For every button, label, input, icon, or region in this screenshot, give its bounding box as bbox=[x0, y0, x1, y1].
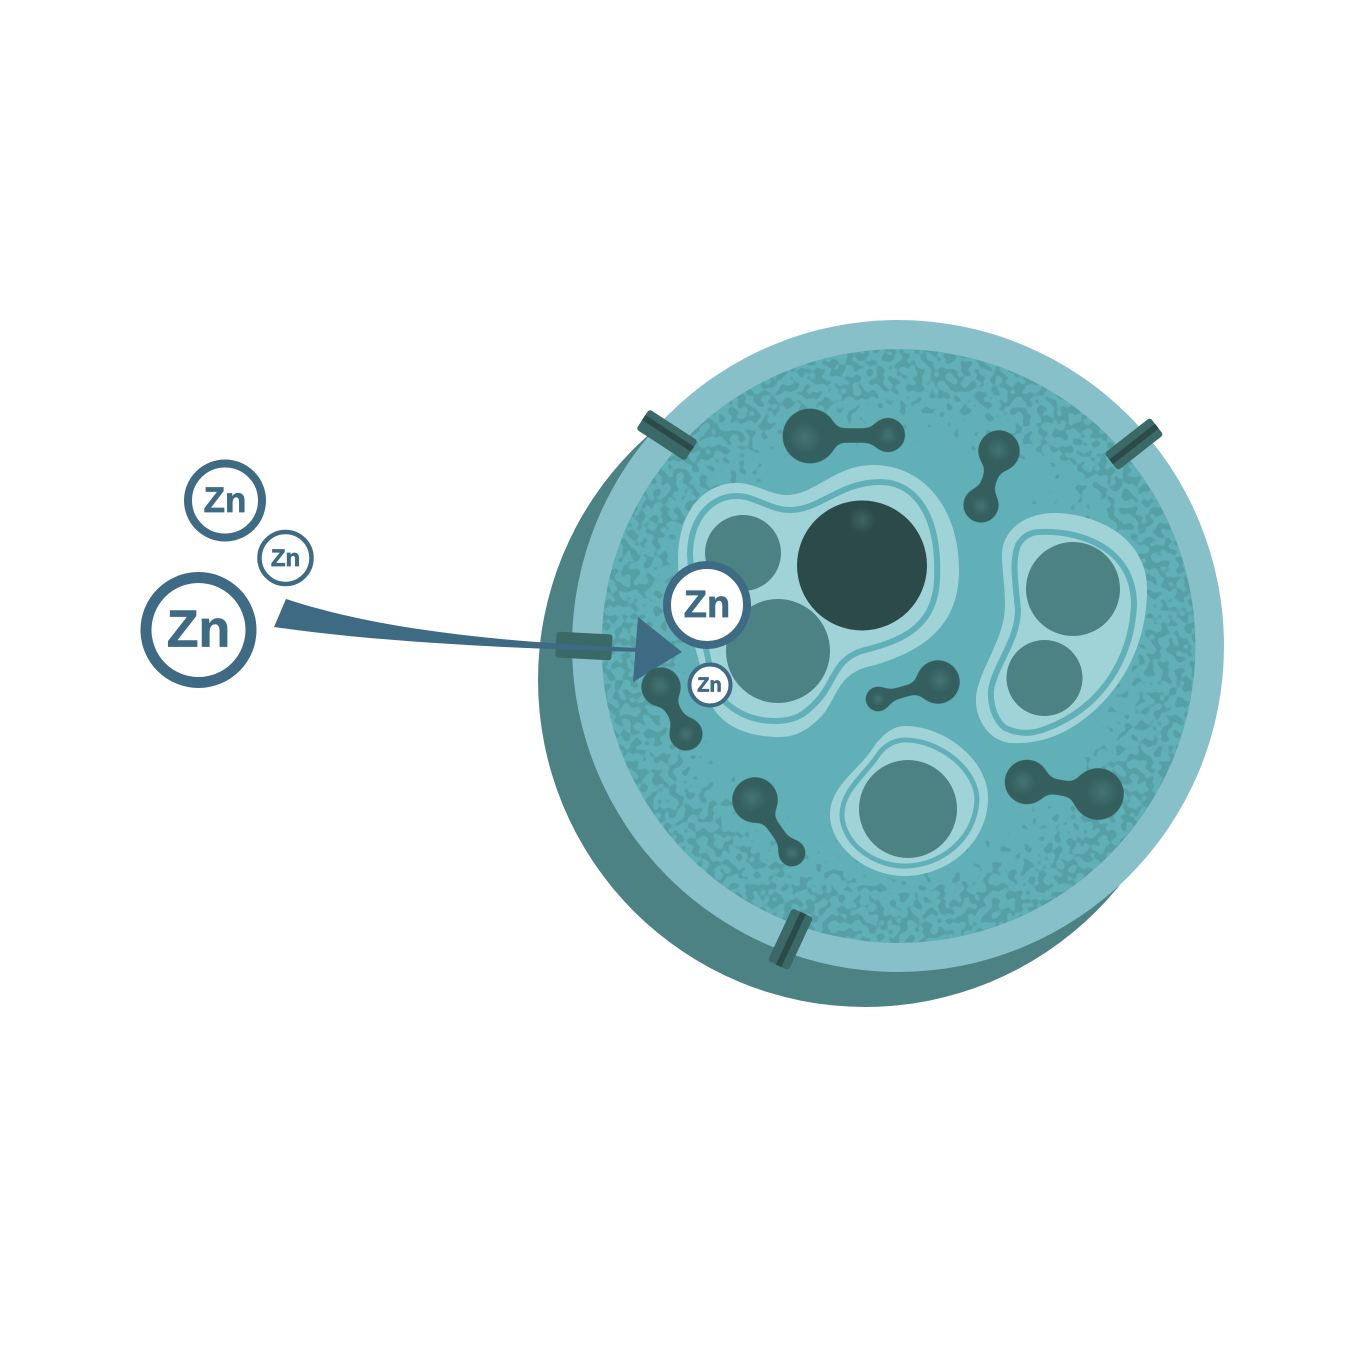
organelle: bottom vesicle bbox=[830, 726, 988, 876]
zinc ion: large: Zn bbox=[167, 600, 230, 658]
dumbbell organelle: lower right bbox=[1005, 760, 1124, 820]
membrane channel: top left bbox=[636, 409, 698, 461]
zinc ion: small: Zn bbox=[271, 545, 300, 572]
organelle: right vesicle bbox=[976, 513, 1147, 743]
organelle: large vesicle with nucleus bbox=[678, 465, 959, 737]
nucleus bbox=[797, 500, 927, 630]
zinc ion: medium, top: Zn bbox=[204, 481, 246, 520]
membrane channel: top right bbox=[1104, 417, 1164, 471]
arrow: zinc uptake bbox=[274, 599, 682, 682]
dumbbell organelle: lower left bbox=[732, 778, 806, 866]
zinc ion: large bbox=[146, 578, 251, 682]
dumbbell organelle: upper right bbox=[964, 430, 1020, 522]
dumbbell organelle: top bbox=[783, 409, 905, 463]
zinc ion: small bbox=[260, 532, 312, 584]
zinc ion: inside cell, large: Zn bbox=[684, 584, 730, 626]
zinc ion: inside cell, small bbox=[690, 664, 730, 706]
membrane channel: left entry bbox=[555, 632, 613, 660]
zinc ion: inside cell, large bbox=[667, 565, 747, 645]
cell membrane ring bbox=[572, 320, 1224, 972]
cytoplasm speckle texture bbox=[602, 349, 1196, 943]
dumbbell organelle: near arrow head bbox=[642, 668, 702, 750]
dumbbell organelle: center bbox=[866, 660, 960, 712]
cell: outer shadow body bbox=[538, 353, 1192, 1007]
zinc ion: medium, top bbox=[188, 464, 262, 538]
cytoplasm bbox=[602, 349, 1196, 943]
zinc ion: inside cell, small: Zn bbox=[697, 674, 722, 696]
membrane channel: bottom bbox=[768, 908, 813, 970]
